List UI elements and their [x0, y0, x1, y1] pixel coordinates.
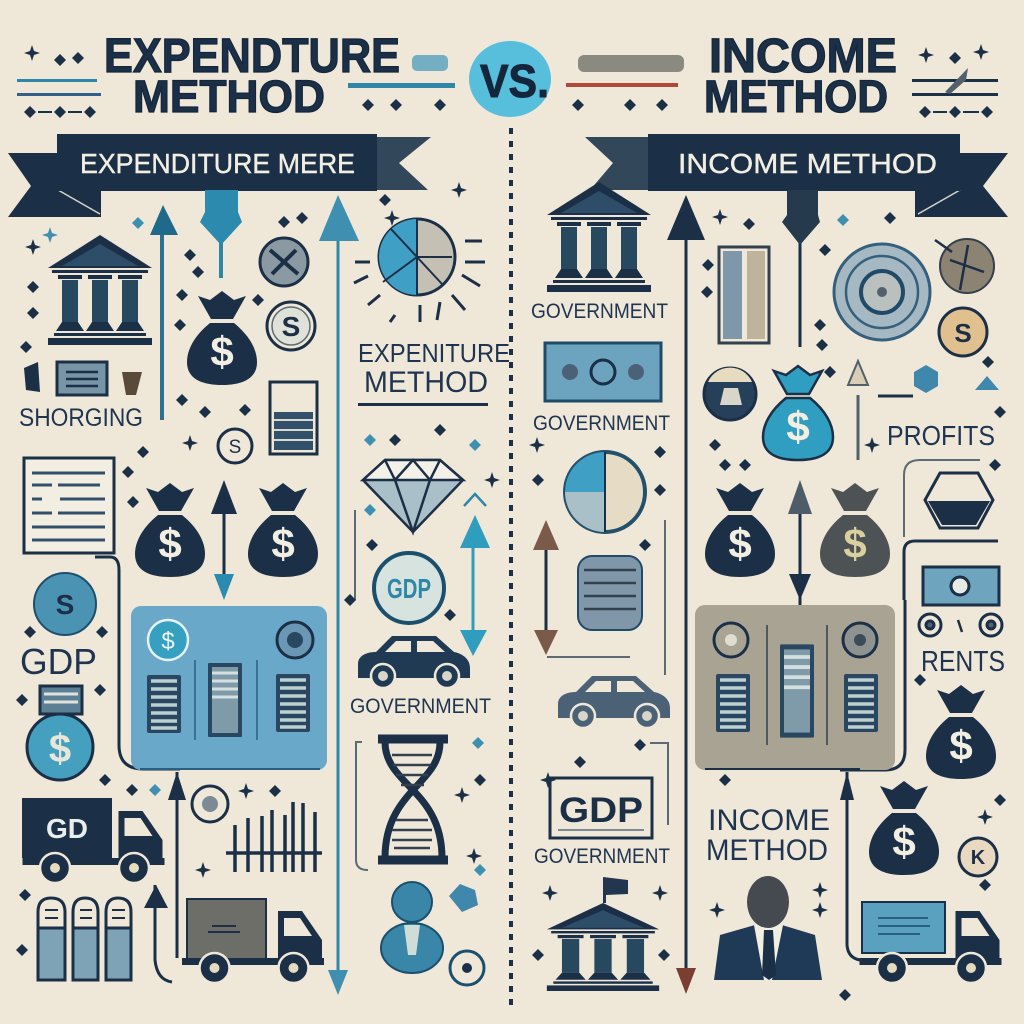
icon: small coin: S [229, 437, 241, 458]
icon: pie chart [354, 219, 485, 322]
icon: bars [38, 898, 131, 980]
ribbon: left: EXPENDITURE MERE [80, 148, 355, 179]
label: income method [706, 804, 830, 867]
icon: document [24, 458, 114, 553]
icon: coin [192, 786, 228, 822]
icon: DNA hourglass [378, 739, 448, 860]
title: income method [704, 30, 897, 122]
icon: small coin [218, 429, 252, 463]
icon: bag: $ [210, 328, 234, 375]
title: income method: METHOD [704, 71, 888, 122]
icon: banknote [545, 343, 661, 401]
icon: bank right top [547, 182, 651, 292]
title: income method: INCOME [709, 30, 897, 83]
icon: bag [248, 483, 318, 577]
ribbon: right [585, 134, 1008, 217]
icon: bag [705, 483, 775, 577]
icon: businessman [714, 876, 822, 980]
VS badge [469, 41, 551, 117]
icon: coin S [267, 302, 315, 350]
icon: bag: $ [728, 520, 752, 567]
icon: hexagon and pointer [878, 365, 999, 396]
icon: vault dial [834, 244, 930, 340]
label: government 3: GOVERNMENT [534, 845, 670, 868]
label: expenditure method: EXPENITURE [358, 338, 510, 368]
icon: stack of coins [578, 556, 642, 630]
icon: bag [187, 291, 257, 385]
icon: truck GDP [22, 798, 164, 883]
icon: coin S right [939, 308, 987, 356]
icon: bag: $ [271, 520, 295, 567]
icon: bank right bottom [547, 877, 659, 991]
icon: car right [558, 676, 670, 728]
icon: teal bag right [763, 366, 833, 460]
panel: left chart [131, 606, 327, 770]
icon: coin S left: S [56, 589, 74, 620]
icon: GDP frame [550, 778, 652, 838]
icon: globe top right [935, 239, 994, 293]
icon: truck GDP: GD [46, 813, 88, 844]
label: GDP: GDP [20, 641, 97, 682]
icon: bag: $ [158, 520, 182, 567]
label: profits: PROFITS [887, 420, 995, 451]
icon: bank left [48, 235, 152, 345]
title: expenditure method: EXPENDTURE [104, 30, 400, 83]
title: expenditure method: METHOD [133, 71, 325, 122]
icon: half globe [565, 452, 645, 532]
arrows: left column [95, 190, 490, 995]
label: government: GOVERNMENT [350, 695, 491, 718]
icon: bag [926, 685, 996, 779]
icon: diamond [363, 460, 463, 532]
icon: small ticket [24, 362, 142, 395]
icon: teal bag right: $ [786, 403, 810, 450]
icon: bag: $ [892, 818, 916, 865]
label: shopping: SHORGING [19, 404, 143, 432]
label: expenditure method: METHOD [364, 366, 488, 399]
icon: hexagon [925, 473, 993, 528]
icon: teal round bag: $ [49, 727, 71, 771]
icon: person left [381, 882, 484, 985]
label: expenditure method [358, 338, 510, 406]
panel: left chart: $ [161, 628, 175, 655]
icon: bag [869, 781, 939, 875]
label: government 2: GOVERNMENT [533, 412, 670, 435]
VS badge: VS. [480, 55, 549, 107]
icon: truck right [860, 902, 1002, 983]
icon: window panel [719, 247, 769, 343]
icon: coin S: S [282, 311, 300, 342]
icon: GDP coin: GDP [387, 573, 431, 604]
ribbon: left [8, 134, 431, 217]
icon: two coins [919, 614, 1002, 636]
icon: banknote small [923, 567, 999, 605]
icon: GDP coin [374, 553, 444, 623]
title accents [17, 44, 998, 118]
icon: truck bottom left [182, 899, 324, 983]
icon: round emblem S [260, 238, 308, 286]
arrows: right column [533, 190, 998, 994]
label: rents: RENTS [921, 646, 1005, 678]
icon: coin S right: S [954, 318, 972, 348]
icon: bag: $ [949, 722, 973, 769]
icon: ledger [270, 382, 317, 454]
label: income method: INCOME [708, 804, 830, 837]
icon: teal round bag [27, 686, 93, 780]
icon: small coin K [959, 838, 997, 876]
icon: bag [135, 483, 205, 577]
icon: small coin K: K [971, 847, 986, 869]
sparkles [16, 182, 1006, 1001]
money bags [27, 291, 996, 875]
label: income method: METHOD [706, 834, 828, 867]
ribbon: right: INCOME METHOD [678, 148, 937, 179]
title: expenditure method [104, 30, 400, 122]
icon: grey bag [820, 483, 890, 577]
icon: grey bag: $ [843, 520, 867, 567]
icon: car left [358, 636, 470, 688]
label: government 1: GOVERNMENT [531, 300, 668, 323]
icon: bar chart lines [226, 802, 322, 872]
icon: GDP frame: GDP [559, 791, 643, 830]
icon: coin S left [34, 573, 96, 635]
center divider [509, 128, 513, 1012]
panel: right chart [695, 605, 895, 770]
icon: round seat [704, 368, 756, 420]
